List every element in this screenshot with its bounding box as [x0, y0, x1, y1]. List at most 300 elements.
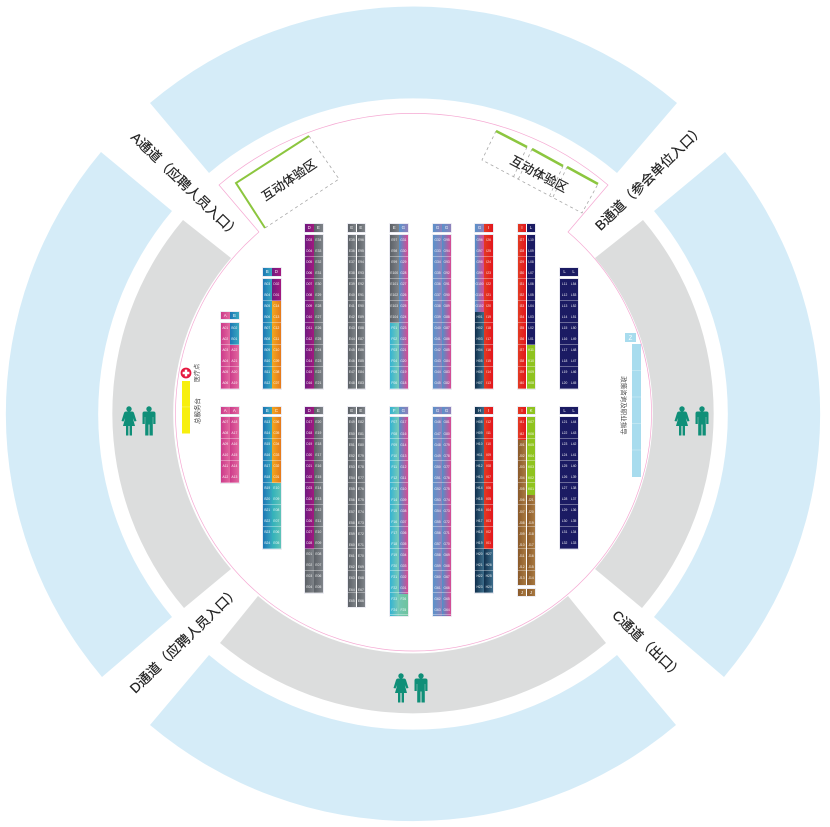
booth block F-G lower: G04	[400, 553, 406, 557]
booth block E-E lower: E55	[349, 487, 355, 491]
booth block G-I upper: I26	[486, 238, 491, 242]
booth block B-D upper	[262, 267, 282, 390]
booth block E-G upper: G30	[400, 249, 406, 253]
booth block E-E lower: E68	[358, 576, 364, 580]
label: channel A: A通道（应聘人员入口）	[128, 129, 243, 241]
booth block F-G lower: F07	[391, 420, 397, 424]
booth block D-E lower: E10	[315, 530, 321, 534]
booth block L lower: L31	[562, 530, 567, 534]
booth block D-E lower: E19	[315, 431, 321, 435]
booth block I-L upper: I29	[520, 260, 524, 264]
booth block I-K lower: J16	[528, 554, 534, 558]
booth block G-G lower: G60	[434, 575, 441, 579]
booth block I-L upper: I30	[520, 271, 524, 275]
booth block L lower: L28	[562, 497, 567, 501]
booth block H-I lower: H25	[486, 574, 492, 578]
booth block I-L upper: I34	[520, 315, 524, 319]
booth block G-G lower: G53	[434, 498, 441, 502]
booth block E-E upper: E90	[358, 304, 364, 308]
hall outline	[176, 113, 652, 651]
booth block G-I upper: H02	[477, 326, 483, 330]
booth block D-E upper: D03	[306, 238, 312, 242]
booth block G-G lower: G50	[434, 465, 441, 469]
booth block D-E lower: E08	[315, 552, 321, 556]
booth block G-G upper: G89	[444, 304, 450, 308]
booth block H-I lower: H10	[477, 442, 483, 446]
booth block L lower: L41	[571, 453, 576, 457]
booth block I-K lower: J09	[519, 532, 525, 536]
booth block B-C lower: E10	[273, 486, 279, 490]
booth block D-E lower: E11	[316, 519, 321, 523]
booth block G-G lower: G59	[434, 564, 441, 568]
booth block E-G upper	[389, 223, 409, 390]
booth block E-E upper: E40	[349, 293, 355, 297]
icon: restroom left	[122, 406, 156, 436]
booth block L upper: L	[572, 269, 575, 274]
booth block F-G lower: G09	[400, 498, 406, 502]
booth block D-E lower: E02	[306, 563, 312, 567]
booth block G-G upper: G	[436, 225, 439, 230]
booth block E-G upper: F06	[391, 381, 397, 385]
booth block E-G upper: E103	[390, 304, 398, 308]
booth header J	[518, 589, 535, 596]
booth block E-G upper: F03	[391, 348, 397, 352]
booth block A lower: A10	[222, 453, 228, 457]
booth block G-G lower: G51	[434, 476, 441, 480]
booth block G-G upper: G90	[444, 293, 450, 297]
booth block E-G upper: E104	[390, 315, 398, 319]
booth block D-E upper: E22	[315, 370, 321, 374]
booth block B-D upper: D01	[273, 293, 279, 297]
booth block G-G lower: G58	[434, 553, 441, 557]
booth block E-G upper: E98	[391, 249, 397, 253]
booth block B-D upper: C11	[273, 337, 279, 341]
booth block I-K lower: J14	[528, 576, 534, 580]
panel: outer ring left	[6, 152, 172, 677]
booth block B-D upper: B09	[264, 348, 270, 352]
booth block B-D upper: B10	[264, 359, 270, 363]
booth block D-E lower: E14	[315, 486, 321, 490]
booth block A upper: B02	[231, 326, 237, 330]
booth block G-I upper: I13	[486, 381, 491, 385]
booth block E-E lower: E62	[349, 565, 355, 569]
booth block G-G lower: G73	[444, 509, 450, 513]
booth block E-E upper: E92	[358, 282, 364, 286]
booth block G-G lower: G75	[444, 487, 450, 491]
booth block L lower: L26	[562, 475, 567, 479]
booth block G-G upper: G88	[444, 315, 450, 319]
booth block I-K lower: I41	[520, 420, 524, 424]
booth block H-I lower: I12	[486, 420, 491, 424]
booth block A upper: A21	[231, 359, 237, 363]
booth block H-I lower: H24	[486, 585, 492, 589]
booth block L upper: L15	[562, 326, 567, 330]
booth block H-I lower: H16	[477, 508, 483, 512]
booth block I-L upper: I39	[520, 370, 524, 374]
booth block B-C lower: C	[275, 408, 278, 412]
booth block I-L upper: L02	[528, 326, 534, 330]
booth block H-I lower: H11	[477, 453, 482, 457]
booth block L lower: L42	[571, 442, 576, 446]
booth block G-G lower: G65	[444, 597, 450, 601]
booth block A lower: A14	[231, 464, 237, 468]
booth block L lower: L38	[571, 486, 576, 490]
booth block A lower: A08	[222, 431, 228, 435]
policy zone bar	[632, 344, 641, 477]
booth block D-E upper: E	[317, 225, 320, 230]
booth block I-K lower	[517, 406, 536, 586]
booth block G-G lower: G	[445, 408, 448, 412]
booth block H-I lower: H13	[477, 475, 483, 479]
booth block D-E upper: E29	[315, 293, 321, 297]
booth block B-D upper: D	[275, 269, 278, 274]
booth block E-E upper: E87	[358, 337, 364, 341]
booth block B-C lower: B18	[264, 475, 270, 479]
booth block E-E lower: E54	[349, 476, 355, 480]
booth block G-G upper: G91	[444, 282, 450, 286]
booth block I-K lower: J03	[519, 465, 525, 469]
booth block E-E lower: E66	[358, 599, 364, 603]
booth block E-E upper: E45	[349, 348, 355, 352]
booth block D-E lower: E18	[315, 442, 321, 446]
booth block H-I lower: H17	[477, 519, 483, 523]
booth block H-I lower: I04	[486, 508, 491, 512]
booth block L lower: L	[572, 408, 575, 412]
booth block L upper: L45	[571, 381, 576, 385]
booth block E-E lower: E58	[349, 521, 355, 525]
booth block A lower: A	[233, 408, 236, 412]
booth block E-G upper: G22	[400, 337, 406, 341]
booth block B-C lower: C03	[273, 453, 279, 457]
booth block I-L upper: I27	[520, 238, 524, 242]
booth block D-E lower: E07	[315, 563, 321, 567]
booth block B-D upper: B11	[264, 370, 270, 374]
booth block A lower: A16	[231, 442, 237, 446]
booth block G-G lower: G78	[444, 454, 450, 458]
booth block D-E upper	[304, 223, 324, 390]
booth block B-C lower: B21	[264, 508, 270, 512]
booth block A lower	[220, 406, 240, 484]
booth block I-K lower: K04	[528, 454, 534, 458]
booth block L lower: L24	[562, 453, 567, 457]
booth block I-K lower: J10	[519, 543, 525, 547]
booth block I-L upper: I35	[520, 326, 524, 330]
booth block I-K lower: J11	[519, 554, 524, 558]
booth block G-I upper: I16	[486, 348, 491, 352]
booth block L upper: L49	[571, 337, 576, 341]
booth block L lower: L30	[562, 519, 567, 523]
booth block D-E upper: D09	[306, 304, 312, 308]
booth block H-I lower: H27	[486, 552, 492, 556]
booth block D-E lower: E13	[315, 497, 321, 501]
booth block E-G upper: G27	[400, 282, 406, 286]
booth block G-G lower: G48	[434, 443, 441, 447]
booth block E-G upper: E102	[390, 293, 398, 297]
booth block F-G lower: G	[402, 408, 405, 412]
booth block F-G lower: F23	[391, 597, 397, 601]
booth block G-I upper: H06	[477, 370, 483, 374]
booth block E-E upper: E38	[349, 271, 355, 275]
booth block G-G lower: G56	[434, 531, 441, 535]
label: service desk: 总服务台	[192, 398, 201, 424]
booth block G-G lower: G67	[444, 575, 450, 579]
booth block A upper: A20	[231, 370, 237, 374]
booth block F-G lower: F25	[400, 608, 406, 612]
booth block G-G lower: G47	[434, 432, 441, 436]
booth block E-E lower: E49	[349, 420, 355, 424]
booth block G-G upper: G33	[434, 249, 441, 253]
booth block B-C lower: E07	[273, 519, 279, 523]
booth block G-G upper: G93	[444, 260, 450, 264]
booth block D-E lower: E12	[315, 508, 321, 512]
booth block I-L upper: K10	[528, 359, 534, 363]
booth block B-D upper: B12	[264, 381, 270, 385]
booth block L lower: L39	[571, 475, 576, 479]
icon: restroom bottom	[394, 673, 428, 702]
booth block D-E lower: D17	[306, 420, 312, 424]
booth block L upper: L51	[571, 315, 576, 319]
booth block B-D upper: C14	[273, 304, 279, 308]
booth block I-L upper	[517, 223, 536, 390]
booth block B-C lower: E09	[273, 497, 279, 501]
booth block I-L upper: I38	[520, 359, 524, 363]
booth block D-E upper: D14	[306, 359, 312, 363]
booth block E-E upper: E	[350, 225, 353, 230]
booth block D-E upper: E26	[315, 326, 321, 330]
booth block H-I lower: I02	[486, 530, 491, 534]
label: channel D: D通道（应聘人员入口）	[126, 583, 242, 696]
booth block L upper: L53	[571, 293, 576, 297]
booth block L lower: L43	[571, 431, 576, 435]
booth block D-E lower: D27	[306, 530, 312, 534]
booth block H-I lower: H21	[477, 563, 483, 567]
booth block H-I lower: H23	[477, 585, 483, 589]
booth block B-D upper: B04	[264, 293, 270, 297]
booth block I-K lower: J13	[519, 576, 525, 580]
icon: restroom right	[674, 406, 708, 436]
booth block H-I lower: H15	[477, 497, 483, 501]
booth block E-E upper: E93	[358, 271, 364, 275]
booth block B-C lower: B24	[264, 541, 270, 545]
booth block E-G upper: F01	[391, 326, 397, 330]
booth block I-L upper: L03	[528, 315, 534, 319]
booth block B-C lower: B15	[264, 442, 270, 446]
booth block E-G upper: G19	[400, 370, 406, 374]
booth block A lower: A	[224, 408, 227, 412]
booth block E-E lower: E50	[349, 432, 355, 436]
booth block G-G upper: G92	[444, 271, 450, 275]
booth block D-E upper: E34	[315, 238, 321, 242]
booth block D-E upper: D08	[306, 293, 312, 297]
booth block B-C lower: B16	[264, 453, 270, 457]
booth block G-I upper: G102	[476, 304, 484, 308]
booth block F-G lower: F19	[391, 553, 397, 557]
booth block E-G upper: G18	[400, 381, 406, 385]
booth block G-G upper: G34	[434, 260, 441, 264]
booth block E-E lower: E60	[349, 543, 355, 547]
booth block D-E upper: E23	[315, 359, 321, 363]
booth block I-L upper: K09	[528, 370, 534, 374]
booth block A upper: A03	[222, 348, 228, 352]
booth block G-G lower: G74	[444, 498, 450, 502]
booth block B-C lower: C02	[273, 464, 279, 468]
booth block E-G upper: E100	[390, 271, 398, 275]
booth block G-G lower: G72	[444, 520, 450, 524]
booth block I-K lower: J02	[519, 454, 525, 458]
booth block D-E lower: E17	[315, 453, 321, 457]
booth block A lower: A09	[222, 442, 228, 446]
booth block E-E upper: E91	[358, 293, 364, 297]
booth block G-I upper: G101	[476, 293, 484, 297]
booth block G-I upper: I22	[486, 282, 491, 286]
booth block G-G lower: G64	[444, 608, 450, 612]
booth block D-E lower: E04	[306, 585, 312, 589]
booth block L upper: L20	[562, 381, 567, 385]
booth block I-K lower: I	[521, 408, 523, 412]
panel: outer ring right	[654, 152, 820, 677]
booth block I-K lower: J17	[528, 543, 534, 547]
booth block G-G lower: G81	[444, 420, 450, 424]
booth block B-D upper: B	[266, 269, 269, 274]
booth block L lower: L29	[562, 508, 567, 512]
booth block L upper: L12	[562, 293, 567, 297]
booth block E-E lower: E63	[349, 576, 355, 580]
booth block I-K lower: K03	[528, 465, 534, 469]
booth block E-E upper: E43	[349, 326, 355, 330]
booth block D-E lower: E03	[306, 574, 312, 578]
booth block E-G upper: G31	[400, 238, 406, 242]
booth block E-G upper: G	[402, 225, 405, 230]
interactive zone right	[482, 131, 598, 213]
booth block D-E upper: E32	[315, 260, 321, 264]
booth block B-C lower: B	[266, 408, 269, 412]
booth block L lower: L27	[562, 486, 567, 490]
booth block E-E upper: E83	[358, 381, 364, 385]
booth block G-G upper: G82	[444, 381, 450, 385]
booth block E-E lower: E61	[349, 554, 355, 558]
booth block H-I lower: I11	[486, 431, 491, 435]
booth block D-E lower	[304, 406, 324, 594]
booth block B-D upper: C10	[273, 348, 279, 352]
booth block G-G lower: G62	[434, 597, 441, 601]
booth block B-D upper: B06	[264, 315, 270, 319]
booth block F-G lower: G06	[400, 531, 406, 535]
booth block L lower: L32	[562, 541, 567, 545]
booth header J: J	[521, 590, 523, 595]
booth block L upper: L13	[562, 304, 567, 308]
booth block D-E lower: D24	[306, 497, 312, 501]
booth block E-E upper	[347, 223, 366, 390]
booth block L lower: L	[563, 408, 566, 412]
booth block G-G upper: G43	[434, 359, 441, 363]
booth block G-G upper: G42	[434, 348, 441, 352]
booth block B-D upper: B03	[264, 282, 270, 286]
booth block E-E upper: E88	[358, 326, 364, 330]
booth block G-I upper: I24	[486, 260, 491, 264]
booth block D-E lower: E09	[315, 541, 321, 545]
booth block H-I lower	[474, 406, 494, 594]
booth block B-C lower: E06	[273, 530, 279, 534]
booth block E-E lower: E65	[349, 599, 355, 603]
booth block E-G upper: G23	[400, 326, 406, 330]
booth block G-G lower: G80	[444, 432, 450, 436]
booth block D-E lower: D	[308, 408, 311, 412]
booth block G-I upper: H05	[477, 359, 483, 363]
booth block D-E lower: E06	[315, 574, 321, 578]
booth block B-D upper: D02	[273, 282, 279, 286]
booth block D-E upper: D10	[306, 315, 312, 319]
booth block F-G lower: F26	[400, 597, 406, 601]
booth block G-G lower: G	[436, 408, 439, 412]
booth block B-C lower: C01	[273, 475, 279, 479]
booth block E-E lower: E72	[358, 532, 364, 536]
panel: grey ring bottom	[220, 596, 606, 713]
booth block D-E upper: E30	[315, 282, 321, 286]
booth block H-I lower: H	[478, 408, 481, 412]
booth block D-E upper: E31	[315, 271, 321, 275]
booth block G-G upper	[432, 223, 452, 390]
booth block I-K lower: J15	[528, 565, 534, 569]
booth block E-E lower: E69	[358, 565, 364, 569]
booth block E-E lower: E78	[358, 465, 364, 469]
booth block L upper: L54	[571, 282, 576, 286]
booth block I-K lower: J21	[528, 498, 534, 502]
booth block E-E lower: E	[359, 408, 362, 412]
booth block G-G lower: G76	[444, 476, 450, 480]
booth block E-E lower: E57	[349, 510, 355, 514]
booth block D-E lower: E16	[315, 464, 321, 468]
booth block E-E upper: E41	[349, 304, 355, 308]
booth block I-L upper: L04	[528, 304, 534, 308]
booth block D-E upper: E24	[315, 348, 321, 352]
booth block F-G lower: F	[393, 408, 396, 412]
booth block G-G upper: G32	[434, 238, 441, 242]
booth block H-I lower: I09	[486, 453, 491, 457]
booth block E-E upper: E37	[349, 260, 355, 264]
booth block D-E upper: D16	[306, 381, 312, 385]
booth block F-G lower: F18	[391, 542, 397, 546]
booth block A upper	[220, 311, 240, 390]
booth block G-G lower: G46	[434, 420, 441, 424]
booth block G-G upper: G41	[434, 337, 441, 341]
booth block D-E lower: D18	[306, 431, 312, 435]
booth block B-D upper: C07	[273, 381, 279, 385]
booth block A lower: A13	[231, 475, 237, 479]
booth block L upper: L50	[571, 326, 576, 330]
booth block L upper: L19	[562, 370, 567, 374]
booth block D-E lower: E20	[315, 420, 321, 424]
booth block E-E lower: E81	[358, 432, 364, 436]
booth block B-D upper: B08	[264, 337, 270, 341]
booth block A lower: A11	[222, 464, 228, 468]
booth block H-I lower: H22	[477, 574, 483, 578]
booth block A upper: A02	[222, 337, 228, 341]
booth block I-K lower: I42	[520, 432, 524, 436]
booth block I-K lower: K06	[528, 432, 534, 436]
booth block F-G lower: F12	[391, 476, 397, 480]
booth block A upper: A22	[231, 348, 237, 352]
booth block E-E lower: E74	[358, 510, 364, 514]
booth block E-E lower: E76	[358, 487, 364, 491]
booth block E-E upper: E47	[349, 370, 355, 374]
booth block B-D upper: B05	[264, 304, 270, 308]
booth block D-E lower: D25	[306, 508, 312, 512]
booth block L upper: L18	[562, 359, 567, 363]
booth block G-I upper: G	[478, 225, 481, 230]
booth block L lower: L22	[562, 431, 567, 435]
booth block G-I upper: G99	[476, 271, 483, 275]
booth block E-E lower: E75	[358, 498, 364, 502]
